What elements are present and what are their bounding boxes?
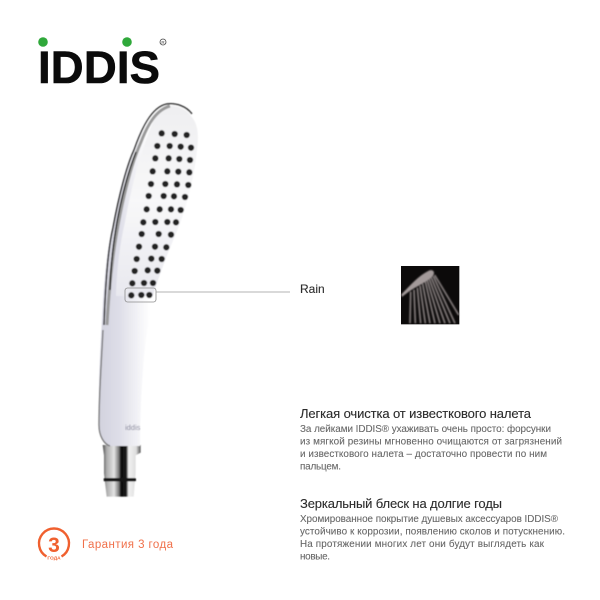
warranty text: Гарантия 3 года (82, 539, 174, 551)
handle brand mark: iddis (125, 423, 141, 432)
body: и известкового налета – достаточно провести по ним (300, 449, 547, 460)
callout: Rain (125, 282, 325, 302)
chrome rim (104, 104, 192, 325)
heading: Зеркальный блеск на долгие годы (300, 496, 502, 511)
callout: Rain: Rain (300, 282, 325, 296)
shower connector (103, 445, 141, 497)
body: Хромированное покрытие душевых аксессуаров IDDIS® (300, 514, 559, 525)
icon: 3 years: ГОДА (47, 556, 61, 562)
icon: 3 years (39, 529, 69, 562)
product: hand shower (99, 104, 200, 497)
body: устойчиво к коррозии, появлению сколов и потускнению. (300, 526, 565, 538)
body: На протяжении многих лет они будут выглядеть как (300, 539, 545, 550)
body: новые. (300, 552, 330, 562)
body: пальцем. (300, 462, 341, 472)
spray nozzles (128, 130, 194, 298)
text block: mirror shine (300, 496, 565, 562)
text block: limescale cleaning (300, 406, 562, 472)
body: из мягкой резины мгновенно очищаются от загрязнений (300, 436, 562, 448)
logo: IDDIS: IDDIS (38, 42, 160, 93)
body: За лейками IDDIS® ухаживать очень просто: форсунки (300, 424, 551, 435)
body (300, 514, 565, 562)
warranty badge (39, 529, 174, 562)
shower head face (116, 106, 198, 296)
body (300, 424, 562, 472)
shower body (99, 104, 200, 446)
icon: 3 years: 3 (48, 534, 60, 557)
heading: Легкая очистка от известкового налета (300, 406, 532, 421)
thumbnail: rain spray (401, 266, 459, 324)
logo: IDDIS: R (161, 40, 165, 45)
